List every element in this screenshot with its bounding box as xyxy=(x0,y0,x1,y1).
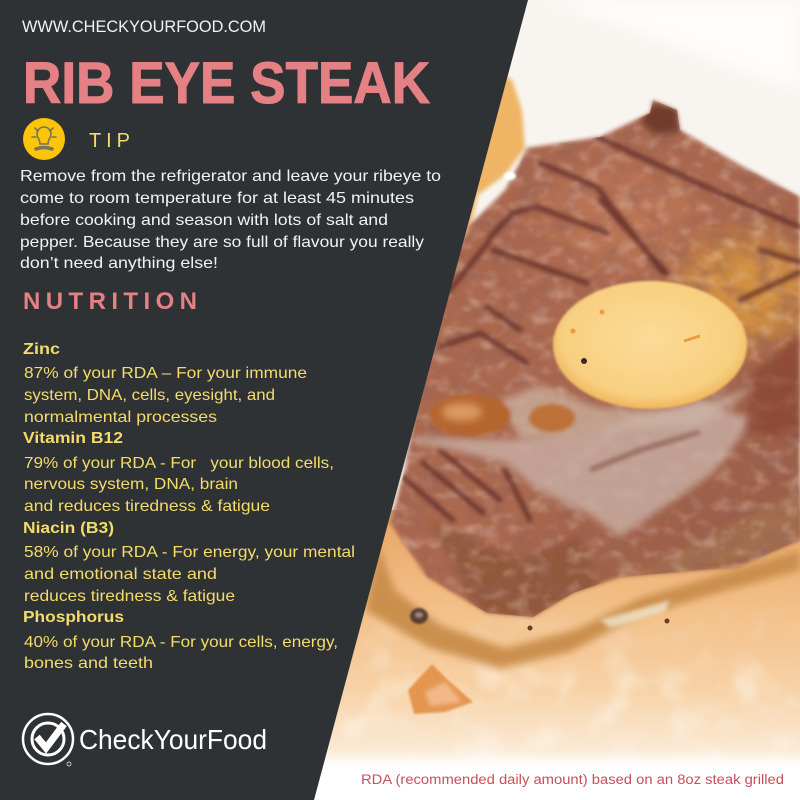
bread crust at plate edge xyxy=(440,70,525,260)
logo: CheckYourFood: CheckYourFood xyxy=(79,724,267,755)
fat glaze xyxy=(413,400,753,537)
tip text: before cooking and season with lots of salt and xyxy=(20,212,388,229)
sauce pool xyxy=(300,510,800,800)
logo: CheckYourFood xyxy=(23,714,267,766)
seared chunks xyxy=(430,394,510,436)
nutrition list xyxy=(23,341,355,672)
phosphorus: Phosphorus xyxy=(23,609,124,626)
niacin: and emotional state and xyxy=(24,566,217,583)
icon: light bulb tip xyxy=(23,118,65,160)
nutrition heading: NUTRITION xyxy=(23,288,197,315)
dark knob on top xyxy=(640,102,680,135)
butter pat xyxy=(553,281,747,409)
phosphorus xyxy=(23,609,338,672)
tip text: pepper. Because they are so full of flavour you really xyxy=(20,234,424,251)
phosphorus: 40% of your RDA - For your cells, energy, xyxy=(24,634,338,651)
vitamin b12: Vitamin B12 xyxy=(23,430,123,447)
zinc: system, DNA, cells, eyesight, and xyxy=(24,387,275,404)
tip text: Remove from the refrigerator and leave your ribeye to xyxy=(20,168,441,185)
glint of plate beside steak xyxy=(504,172,516,180)
vitamin b12: and reduces tiredness & fatigue xyxy=(24,498,270,515)
vitamin b12: 79% of your RDA - For your blood cells, xyxy=(24,455,334,472)
right dark crust xyxy=(745,335,800,440)
zinc: 87% of your RDA – For your immune xyxy=(24,365,307,382)
niacin: reduces tiredness & fatigue xyxy=(24,588,235,605)
zinc: normalmental processes xyxy=(24,409,217,426)
niacin: Niacin (B3) xyxy=(23,520,114,537)
vitamin b12: nervous system, DNA, brain xyxy=(24,476,238,493)
zinc xyxy=(23,341,307,426)
title: RIB EYE STEAK xyxy=(23,51,430,116)
phosphorus: bones and teeth xyxy=(24,655,153,672)
peppercorn xyxy=(410,608,428,624)
footnote: RDA (recommended daily amount) based on an 8oz steak grilled xyxy=(361,772,784,787)
niacin: 58% of your RDA - For energy, your mental xyxy=(24,544,355,561)
vitamin b12 xyxy=(23,430,334,515)
zinc: Zinc xyxy=(23,341,60,358)
sauce chunk xyxy=(408,664,473,714)
tip heading: TIP xyxy=(89,130,130,152)
website url: WWW.CHECKYOURFOOD.COM xyxy=(22,18,266,36)
grill marks xyxy=(403,137,800,520)
dark diagonal panel xyxy=(0,0,528,800)
tip text: don’t need anything else! xyxy=(20,255,218,272)
tip text xyxy=(20,168,441,272)
niacin xyxy=(23,520,355,605)
photo: grilled rib eye steak with butter on a plate xyxy=(300,0,800,800)
steak body xyxy=(390,100,800,617)
tip text: come to room temperature for at least 45 minutes xyxy=(20,190,414,207)
